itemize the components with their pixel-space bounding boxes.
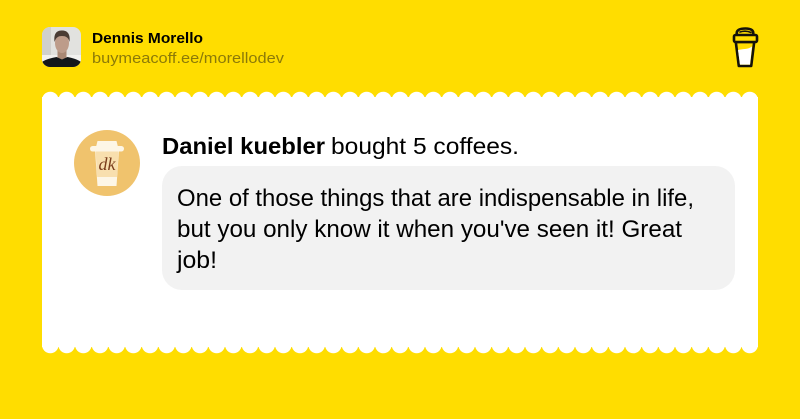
avatar: profile photo	[42, 27, 81, 67]
message bubble	[162, 166, 735, 290]
icon: Buy Me a Coffee cup logo	[734, 28, 757, 66]
message text: job!	[176, 247, 217, 274]
panel: supporter message card	[42, 92, 758, 353]
icon: supporter coffee cup avatar: dk	[98, 154, 116, 174]
supporter headline: Daniel kuebler	[162, 133, 325, 159]
message text	[176, 185, 694, 274]
message text: but you only know it when you've seen it! Great	[177, 216, 682, 243]
supporter headline: bought 5 coffees.	[331, 133, 519, 159]
creator url: buymeacoff.ee/morellodev	[92, 50, 285, 67]
icon: supporter coffee cup avatar	[74, 130, 140, 196]
message text: One of those things that are indispensable in life,	[177, 185, 694, 212]
creator name: Dennis Morello	[92, 30, 203, 47]
